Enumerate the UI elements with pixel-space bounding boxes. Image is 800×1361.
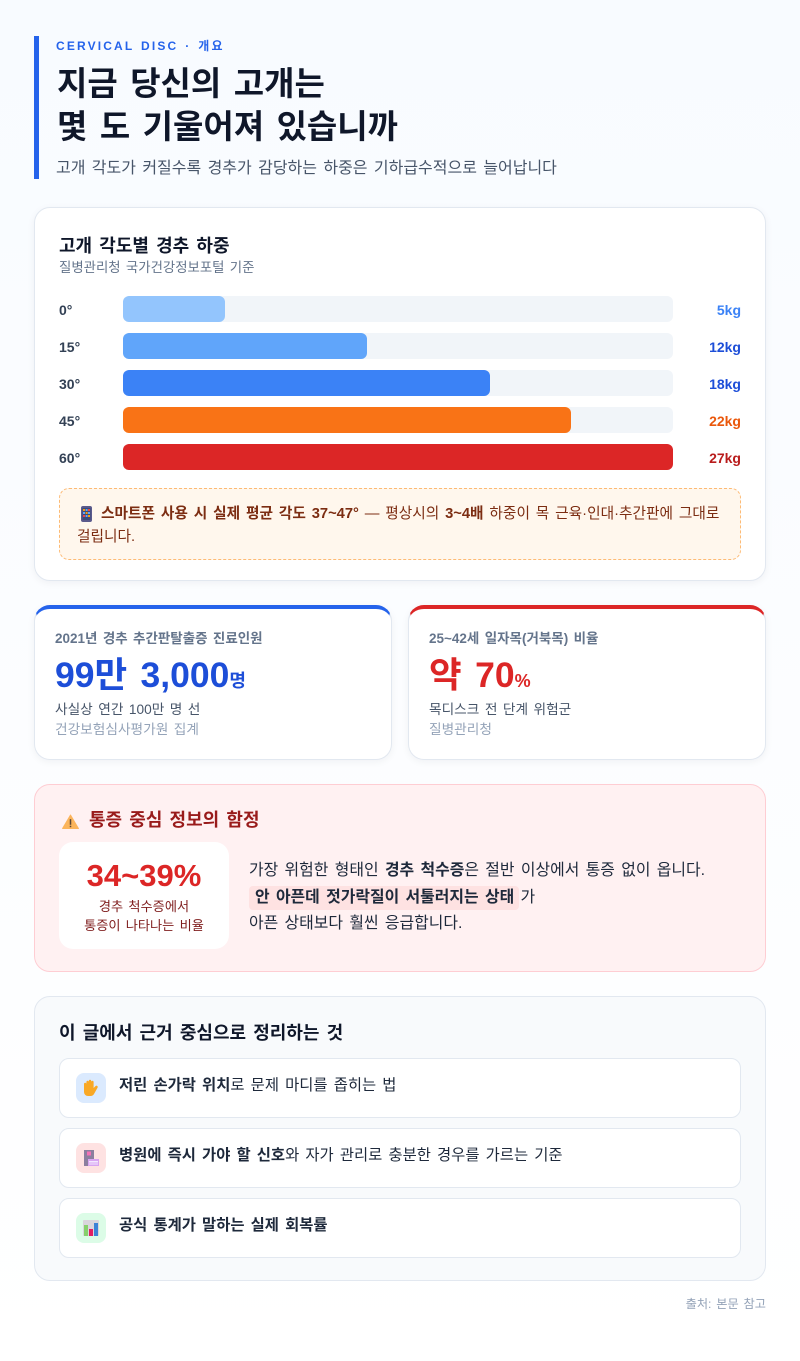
- stat note: 사실상 연간 100만 명 선: [55, 702, 200, 717]
- bar row: 45 degrees: 45°: [59, 413, 80, 429]
- stat label: 25~42세 일자목(거북목) 비율: [429, 631, 598, 646]
- warning body text: 가: [521, 888, 535, 906]
- stat caption: 경추 척수증에서: [99, 899, 189, 914]
- header: [34, 36, 634, 179]
- callout text: [77, 505, 719, 545]
- panel: stat disc patients: [34, 605, 392, 760]
- stat note: 건강보험심사평가원 집계: [55, 722, 199, 737]
- stat note: [55, 702, 200, 737]
- subtitle: 고개 각도가 커질수록 경추가 감당하는 하중은 기하급수적으로 늘어납니다: [56, 160, 557, 177]
- list item 3: [59, 1198, 741, 1258]
- callout text: 걸립니다.: [77, 529, 135, 545]
- icon: bar chart: [76, 1213, 106, 1243]
- warning body text: [249, 861, 705, 932]
- list text 2: 병원에 즉시 가야 할 신호와 자가 관리로 충분한 경우를 가르는 기준: [119, 1147, 563, 1164]
- list text 3: 공식 통계가 말하는 실제 회복률: [119, 1217, 328, 1234]
- stat value: 약 70%: [429, 655, 531, 695]
- list item 2: [59, 1128, 741, 1188]
- stat value: 99만 3,000명: [55, 655, 246, 695]
- stat box: [59, 842, 229, 949]
- bar row: 0 degrees: 5kg: [717, 302, 741, 318]
- bar row: 60 degrees: [59, 444, 741, 470]
- panel: pain-centered information trap: [34, 784, 766, 972]
- bar row: 30 degrees: 18kg: [709, 376, 741, 392]
- panel: stat straight neck: [408, 605, 766, 760]
- stat note: 목디스크 전 단계 위험군: [429, 702, 571, 717]
- panel: neck load bar chart: [34, 207, 766, 581]
- bar row: 0 degrees: [59, 296, 741, 322]
- list heading: 이 글에서 근거 중심으로 정리하는 것: [59, 1023, 343, 1043]
- stat caption: [84, 899, 204, 933]
- title: [57, 65, 398, 145]
- bar row: 30 degrees: 30°: [59, 376, 80, 392]
- chart source: 질병관리청 국가건강정보포털 기준: [59, 260, 254, 275]
- icon: smartphone: [81, 506, 92, 522]
- bar row: 15 degrees: [59, 333, 741, 359]
- warning heading: 통증 중심 정보의 함정: [89, 810, 260, 830]
- stat note: [429, 702, 571, 737]
- bar row: 30 degrees: [59, 370, 741, 396]
- warning body text: 가장 위험한 형태인 경추 척수증은 절반 이상에서 통증 없이 옵니다.: [249, 862, 705, 879]
- title: 지금 당신의 고개는: [57, 65, 325, 102]
- stat label: 2021년 경추 추간판탈출증 진료인원: [55, 631, 263, 646]
- icon: hospital: [76, 1143, 106, 1173]
- stat caption: 통증이 나타나는 비율: [84, 918, 204, 933]
- panel: what this article covers: [34, 996, 766, 1281]
- callout: smartphone angle: [59, 488, 741, 560]
- warning body text: 안 아픈데 젓가락질이 서툴러지는 상태: [255, 888, 514, 906]
- icon: warning: [62, 814, 79, 829]
- bar row: 15 degrees: 15°: [59, 339, 80, 355]
- bar row: 45 degrees: 22kg: [709, 413, 741, 429]
- bar row: 45 degrees: [59, 407, 741, 433]
- source note: 출처: 본문 참고: [686, 1297, 766, 1311]
- stat note: 질병관리청: [429, 722, 492, 737]
- list text 1: 저린 손가락 위치로 문제 마디를 좁히는 법: [119, 1077, 396, 1094]
- bar row: 0 degrees: 0°: [59, 302, 72, 318]
- stat value: 34~39%: [87, 858, 201, 893]
- bar row: 15 degrees: 12kg: [709, 339, 741, 355]
- eyebrow label: CERVICAL DISC · 개요: [56, 39, 225, 53]
- bar row: 60 degrees: 27kg: [709, 450, 741, 466]
- bar row: 60 degrees: 60°: [59, 450, 80, 466]
- callout text: 스마트폰 사용 시 실제 평균 각도 37~47° — 평상시의 3~4배 하중이 목 근육·인대·추간판에 그대로: [101, 506, 719, 522]
- warning body text: 아픈 상태보다 훨씬 응급합니다.: [249, 915, 462, 932]
- icon: hand: [76, 1073, 106, 1103]
- title: 몇 도 기울어져 있습니까: [57, 108, 398, 145]
- list item 1: [59, 1058, 741, 1118]
- chart heading: 고개 각도별 경추 하중: [59, 236, 230, 256]
